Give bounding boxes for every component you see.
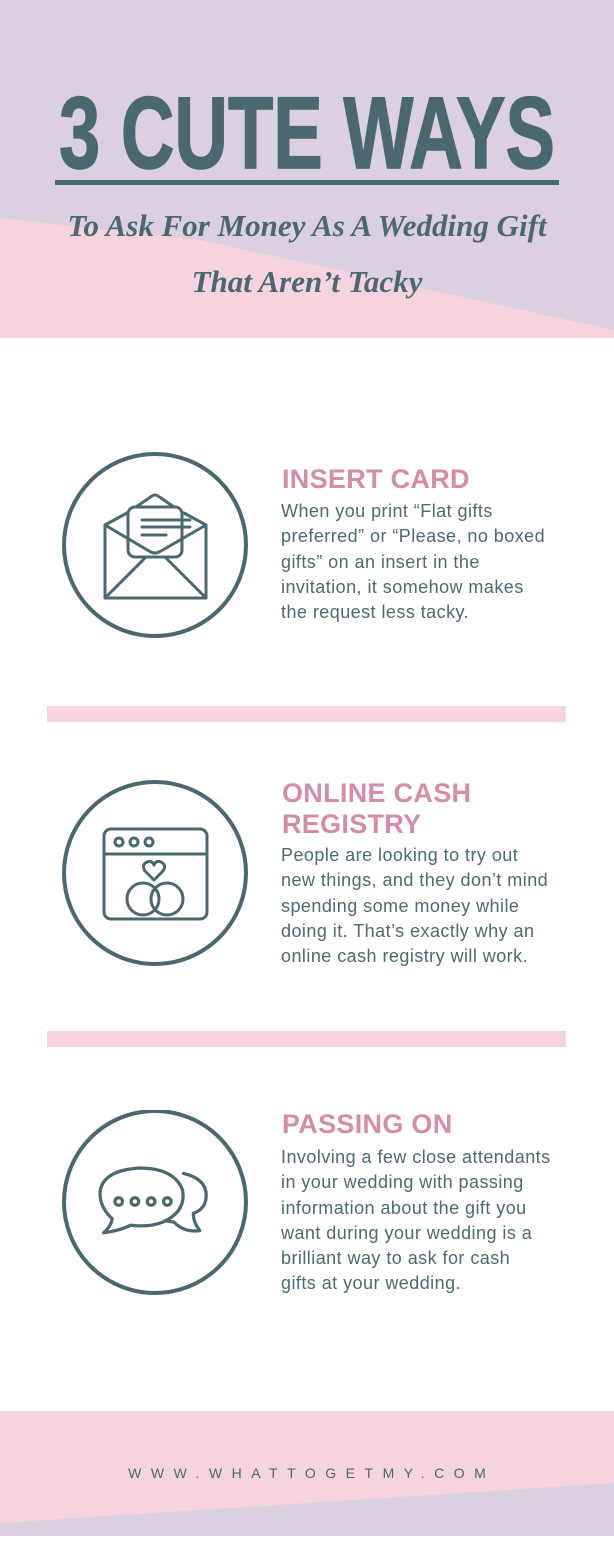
footer url: WWW.WHATTOGETMY.COM [128, 1465, 495, 1481]
text: online cash registry: online cash registry will work. [281, 946, 528, 966]
heading: insert card: INSERT CARD [282, 464, 470, 494]
subtitle: To Ask For Money As A Wedding Gift [67, 208, 547, 243]
text: insert card: invitation, it somehow makes [281, 577, 524, 597]
section 3 icon: speech bubbles [62, 1110, 248, 1295]
section 2 icon: browser rings [62, 780, 248, 966]
text: online cash registry: spending some money while [281, 896, 519, 916]
text: passing on: brilliant way to ask for cash [281, 1248, 510, 1268]
text: online cash registry [281, 845, 548, 966]
heading: online cash registry: REGISTRY [282, 809, 421, 839]
text: passing on: Involving a few close attendants [281, 1147, 551, 1167]
heading: online cash registry [282, 778, 471, 839]
text: insert card: preferred” or “Please, no boxed [281, 526, 545, 546]
text: insert card: gifts” on an insert in the [281, 552, 480, 572]
text: online cash registry: new things, and they don’t mind [281, 870, 548, 890]
text: insert card [281, 501, 545, 622]
footer band [0, 1411, 614, 1536]
text: passing on: want during your wedding is a [281, 1223, 532, 1243]
text: passing on: information about the gift you [281, 1198, 527, 1218]
subtitle [67, 208, 548, 299]
text: passing on: gifts at your wedding. [281, 1273, 461, 1293]
text: online cash registry: People are looking to try out [281, 845, 518, 865]
divider 2 [47, 1031, 566, 1047]
subtitle: That Aren’t Tacky [192, 264, 422, 299]
text: insert card: When you print “Flat gifts [281, 501, 493, 521]
header background [0, 0, 614, 338]
text: passing on [281, 1147, 551, 1293]
text: passing on: in your wedding with passing [281, 1172, 524, 1192]
text: online cash registry: doing it. That’s exactly why an [281, 921, 534, 941]
heading: passing on: PASSING ON [282, 1109, 453, 1139]
divider 1 [47, 706, 566, 722]
text: insert card: the request less tacky. [281, 602, 469, 622]
heading: online cash registry: ONLINE CASH [282, 778, 471, 808]
section 1 icon: envelope [62, 452, 248, 638]
